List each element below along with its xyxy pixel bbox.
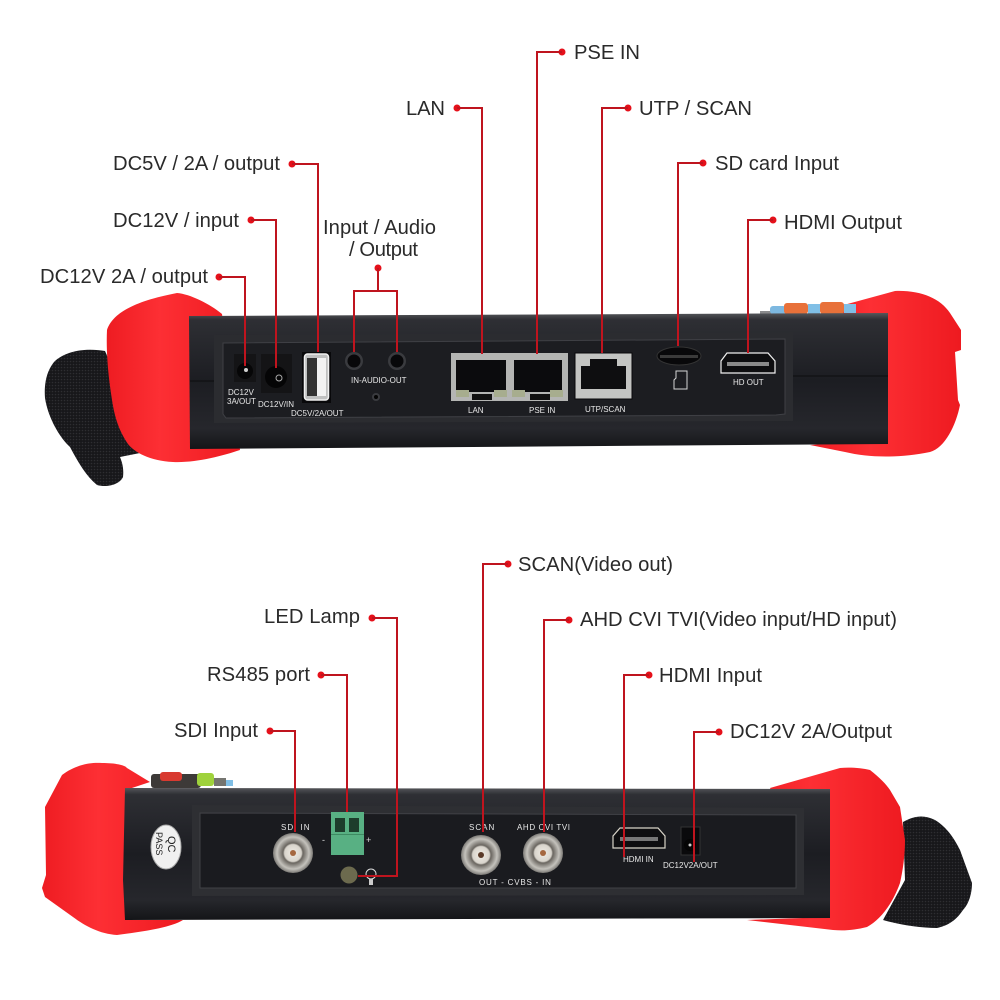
callout: UTP SCAN: UTP / SCAN <box>639 98 752 120</box>
callout: DC5V output <box>113 153 318 352</box>
port: UTP/SCAN: UTP/SCAN <box>585 405 626 414</box>
port: audio jacks: IN-AUDIO-OUT <box>351 376 407 385</box>
bottom device <box>42 763 972 935</box>
port: USB DC5V <box>291 352 344 418</box>
top-edge knobs <box>151 772 233 788</box>
callout: LED lamp <box>264 606 397 876</box>
callout: HDMI output: HDMI Output <box>784 212 902 234</box>
callout: LAN: LAN <box>406 98 445 120</box>
callout: AHD CVI TVI video input: AHD CVI TVI(Video input/HD input) <box>580 609 897 631</box>
top device <box>45 291 961 486</box>
callout: input audio output: / Output <box>349 239 418 261</box>
port: DC12V in: DC12V/IN <box>258 400 294 409</box>
port: DC12V in <box>258 354 294 409</box>
port: UTP/SCAN <box>575 353 632 414</box>
red bumper: bottom right <box>747 768 905 930</box>
recessed panel: bottom <box>192 805 804 896</box>
callout: input audio output: Input / Audio <box>323 217 436 239</box>
callout: HDMI input: HDMI Input <box>659 665 762 687</box>
port: DC12V 3A out: 3A/OUT <box>227 397 256 406</box>
port: HDMI in: HDMI IN <box>623 855 654 864</box>
callout: HDMI output <box>748 212 902 353</box>
callout: SCAN video out: SCAN(Video out) <box>518 554 673 576</box>
callout: DC12V 2A output top: DC12V 2A / output <box>40 266 208 288</box>
port: SCAN: SCAN <box>469 823 495 832</box>
callout: RS485 port <box>207 664 347 812</box>
red bumper: bottom left <box>42 763 183 935</box>
top-edge buttons <box>760 302 856 315</box>
callout: SDI input: SDI Input <box>174 720 258 742</box>
recessed panel: top <box>214 332 793 423</box>
callout: SDI input <box>174 720 295 832</box>
port: PSE IN <box>509 353 568 415</box>
QC PASS sticker: PASS <box>154 832 164 855</box>
port: USB DC5V: DC5V/2A/OUT <box>291 409 344 418</box>
callout: LAN <box>406 98 482 354</box>
port: LAN: LAN <box>468 406 484 415</box>
port: LAN <box>451 353 512 415</box>
callout: input audio output <box>323 217 436 352</box>
port: DC12V out <box>663 827 718 870</box>
port: PSE IN: PSE IN <box>529 406 555 415</box>
port: RS485 terminal: + <box>366 835 371 845</box>
callout: DC5V output: DC5V / 2A / output <box>113 153 280 175</box>
callout: PSE IN <box>537 42 640 354</box>
callout: DC12V 2A output bottom: DC12V 2A/Output <box>730 721 892 743</box>
callout: RS485 port: RS485 port <box>207 664 310 686</box>
port: SCAN <box>461 823 501 875</box>
port: DC12V 3A out <box>227 354 256 406</box>
port: SDI in: SDI IN <box>281 823 311 832</box>
port: RS485 terminal <box>322 812 371 855</box>
red bumper: top left <box>107 293 240 462</box>
callout: SCAN video out <box>483 554 673 832</box>
port: HDMI out: HD OUT <box>733 378 764 387</box>
port: RS485 terminal: - <box>322 835 325 845</box>
strap: left <box>45 350 140 486</box>
QC PASS sticker: QC <box>165 836 177 853</box>
callout: SD card input <box>678 153 839 346</box>
callout: DC12V 2A output bottom <box>694 721 892 862</box>
callout: HDMI input <box>624 665 762 857</box>
port: DC12V 3A out: DC12V <box>228 388 254 397</box>
port: AHD CVI TVI: AHD CVI TVI <box>517 823 571 832</box>
callout: DC12V 2A output top <box>40 266 245 366</box>
label: out cvbs in: OUT - CVBS - IN <box>479 878 552 887</box>
callout: AHD CVI TVI video input <box>544 609 897 832</box>
port: AHD CVI TVI <box>517 823 571 873</box>
QC PASS sticker <box>151 825 181 869</box>
callout: DC12V input <box>113 210 276 368</box>
port: SDI in <box>273 823 313 873</box>
port: DC12V out: DC12V2A/OUT <box>663 861 718 870</box>
red bumper: top right <box>810 291 961 456</box>
device body: top <box>189 313 888 449</box>
port: HDMI in <box>613 828 665 864</box>
callout: DC12V input: DC12V / input <box>113 210 239 232</box>
callout: SD card input: SD card Input <box>715 153 839 175</box>
callout: LED lamp: LED Lamp <box>264 606 360 628</box>
port: HDMI out <box>721 353 775 387</box>
LED lamp <box>340 866 376 885</box>
callout: UTP SCAN <box>602 98 752 353</box>
callout: PSE IN: PSE IN <box>574 42 640 64</box>
port plate: bottom <box>200 813 796 888</box>
device body: bottom <box>123 788 830 920</box>
port: SD card <box>657 347 701 389</box>
port plate: top <box>223 339 785 418</box>
port: audio jacks <box>345 352 407 401</box>
strap: right <box>883 816 972 928</box>
